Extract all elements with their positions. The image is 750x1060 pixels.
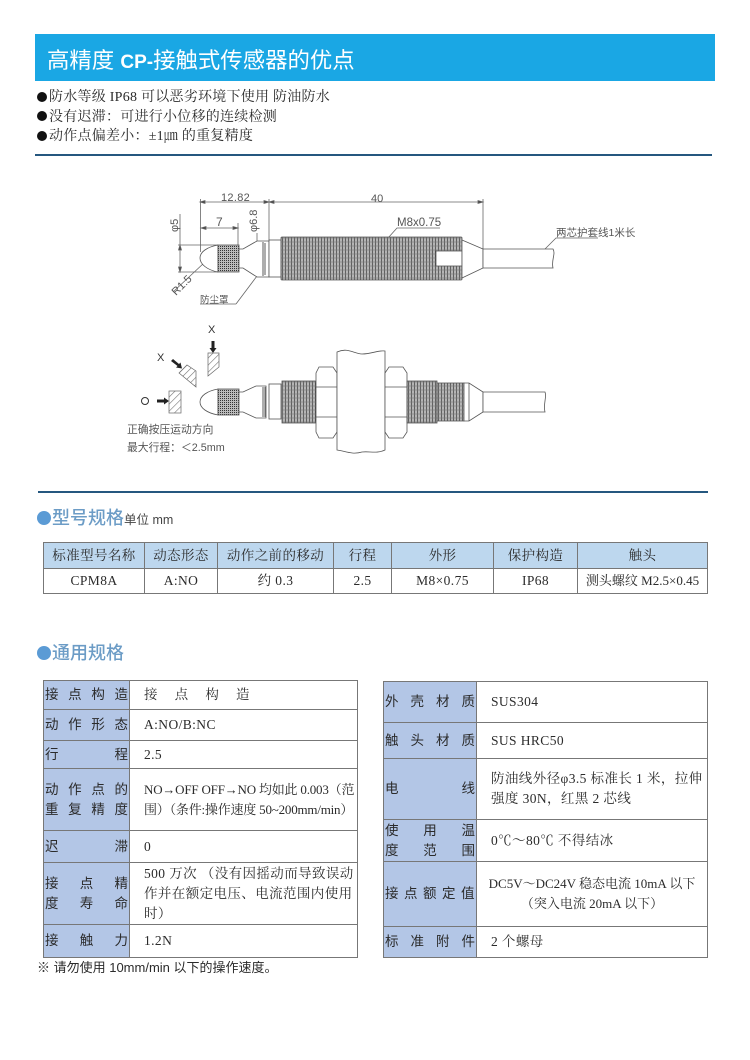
dimension labels: 12.82	[221, 192, 250, 204]
table: general specification right: 强度 30N，红黑 2 芯线	[491, 791, 631, 806]
table: general specification right	[383, 681, 708, 958]
title banner	[35, 34, 715, 81]
table: general specification right: 度 范 围	[385, 842, 475, 858]
table: general specification right: 防油线外径φ3.5 标准长 1 米，拉伸	[491, 771, 703, 786]
table: general specification left: 作并在额定电压、电流范围内使用	[144, 886, 352, 900]
table: general specification right: 电 线	[385, 781, 475, 796]
table: general specification left: 接 点 构 造	[144, 687, 250, 702]
table: model specification: 保护构造	[508, 548, 563, 562]
feature list	[37, 88, 330, 144]
table: general specification left: 接 点 精	[45, 876, 128, 890]
dimension labels: R1.5	[170, 273, 195, 298]
table: general specification left: 行 程	[45, 746, 128, 762]
table: general specification left: A:NO/B:NC	[144, 717, 216, 732]
table: general specification left: 0	[144, 838, 151, 854]
table: general specification left	[43, 680, 358, 958]
table: general specification left: 围）（条件:操作速度 50~200mm/min）	[144, 802, 353, 816]
drawing: sensor dimensions	[173, 199, 598, 304]
table: general specification right: 使 用 温	[385, 822, 475, 838]
table: model specification: 测头螺纹 M2.5×0.45	[586, 573, 699, 588]
table: general specification right: （突入电流 20mA 以下）	[521, 896, 663, 911]
dimension labels: 防尘罩	[200, 294, 229, 306]
dimension labels: φ5	[169, 219, 181, 232]
table: general specification left: 时）	[144, 906, 172, 920]
title banner: 高精度 CP-接触式传感器的优点	[47, 48, 355, 73]
footnote: ※ 请勿使用 10mm/min 以下的操作速度。	[37, 960, 278, 975]
technical drawings	[127, 192, 636, 454]
table: model specification: 行程	[349, 548, 376, 562]
table: general specification right: 2 个螺母	[491, 934, 544, 949]
table: general specification left: 2.5	[144, 746, 162, 762]
feature list: 没有迟滞：可进行小位移的连续检测	[49, 110, 277, 124]
dimension labels: φ6.8	[248, 210, 260, 232]
direction notes: 正确按压运动方向	[127, 422, 213, 436]
table: model specification: IP68	[522, 573, 549, 588]
table: general specification left: NO→OFF OFF→NO 均如此 0.003（范	[144, 782, 354, 796]
dimension labels: 两芯护套线1米长	[556, 226, 636, 239]
table: model specification: 触头	[629, 548, 656, 562]
dimension labels: M8x0.75	[397, 217, 441, 229]
feature list: 动作点偏差小：±1㎛ 的重复精度	[49, 129, 253, 144]
sensor body	[200, 237, 554, 280]
heading: model specification: 型号规格单位 mm	[52, 508, 173, 528]
direction notes	[127, 422, 225, 454]
table: model specification: 外形	[429, 548, 456, 562]
dimension labels: 40	[371, 193, 383, 205]
mounted sensor	[200, 350, 546, 453]
table: model specification	[43, 542, 708, 594]
direction notes: 最大行程：＜2.5mm	[127, 440, 225, 454]
table: model specification: 动作之前的移动	[227, 548, 324, 562]
table: general specification right: 外 壳 材 质	[385, 694, 475, 709]
heading: general specification: 通用规格	[52, 643, 124, 663]
dimension lines	[173, 199, 598, 304]
table: general specification right: SUS304	[491, 694, 538, 709]
drawing: installation and press direction	[127, 324, 546, 454]
table: general specification right: SUS HRC50	[491, 732, 564, 748]
table: general specification left: 重 复 精 度	[45, 802, 128, 816]
press direction markers: X	[157, 352, 165, 364]
dimension labels: 7	[216, 215, 223, 229]
table: model specification: 动态形态	[153, 548, 209, 562]
table: model specification: CPM8A	[70, 573, 118, 588]
table: model specification: 2.5	[353, 573, 372, 588]
table: general specification right: 标 准 附 件	[385, 934, 475, 949]
table: general specification right: 接 点 额 定 值	[385, 886, 475, 901]
table: model specification: 约 0.3	[258, 573, 293, 588]
table: general specification left: 度 寿 命	[45, 896, 128, 910]
table: general specification left: 动 作 点 的	[45, 782, 128, 796]
table: general specification left: 接 点 构 造	[45, 687, 128, 702]
press direction markers	[142, 324, 219, 413]
table: general specification right: DC5V～DC24V 稳态电流 10mA 以下	[489, 876, 695, 891]
table: general specification right: 触 头 材 质	[385, 732, 475, 748]
table: general specification left: 1.2N	[144, 933, 172, 948]
press direction markers: X	[208, 324, 216, 336]
table: model specification: M8×0.75	[416, 573, 469, 588]
table: general specification right: 0℃～80℃ 不得结冰	[491, 832, 614, 848]
table: general specification left: 动 作 形 态	[45, 717, 128, 732]
feature list: 防水等级 IP68 可以恶劣环境下使用 防油防水	[49, 90, 330, 105]
table: model specification: 标准型号名称	[52, 548, 136, 562]
table: general specification left: 500 万次 （没有因摇动而导致误动	[144, 866, 354, 880]
dimension labels	[169, 192, 636, 306]
table: general specification left: 迟 滞	[45, 838, 128, 854]
table: model specification: A:NO	[164, 573, 198, 588]
table: general specification left: 接 触 力	[45, 933, 128, 948]
